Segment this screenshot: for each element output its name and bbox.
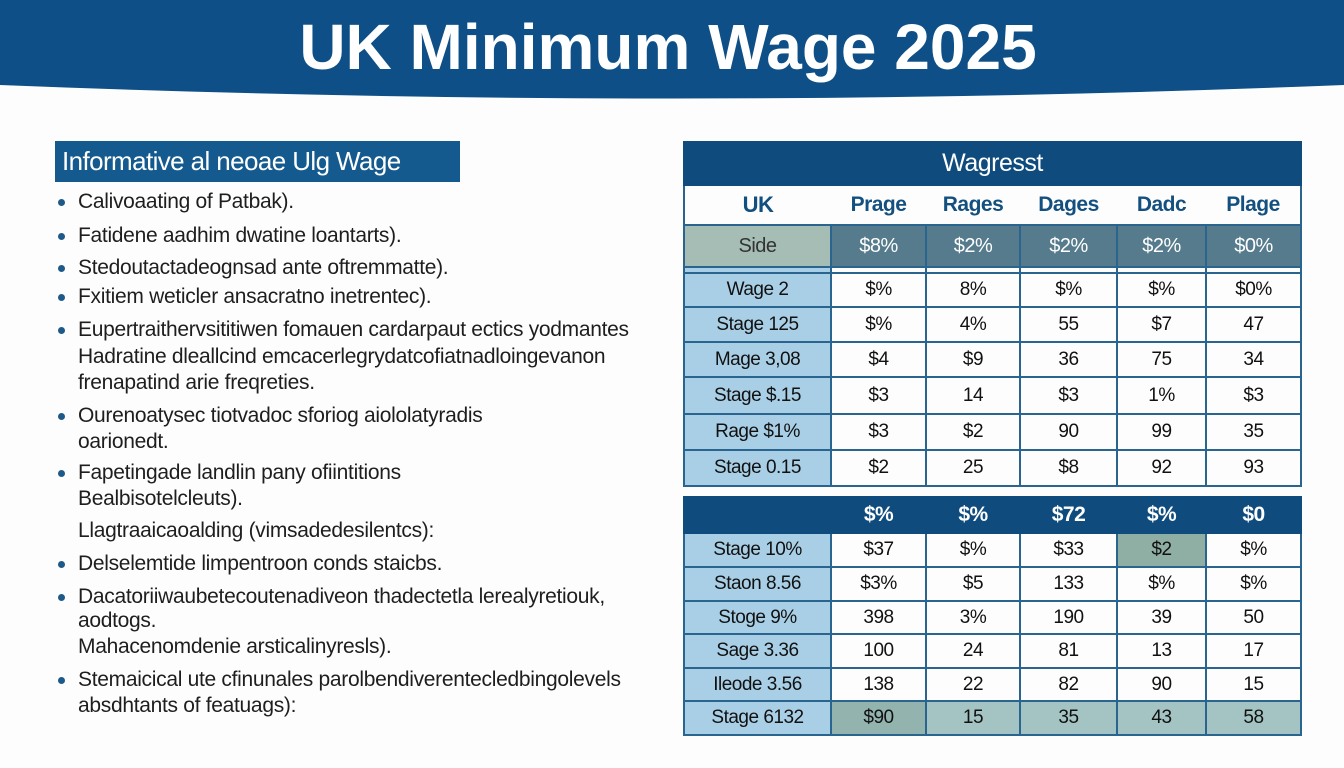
table 2: stage rates: Staon 8.56 (714, 573, 801, 594)
table 2: stage rates (683, 496, 1302, 736)
table 2: stage rates: 24 (963, 640, 983, 661)
table 1: wage rates: 47 (1243, 314, 1264, 334)
table 1: wage rates: 34 (1243, 348, 1264, 370)
bullet list: oarionedt. (78, 430, 168, 453)
table 2: stage rates: 15 (963, 707, 983, 728)
table 2: stage rates: Sage 3.36 (716, 640, 799, 661)
table 2: stage rates: 22 (963, 674, 983, 694)
table 2: stage rates: 398 (863, 606, 894, 628)
table 1: wage rates: $3 (1058, 384, 1079, 406)
table 1: wage rates: 35 (1243, 421, 1264, 442)
table 1: wage rates: Stage 0.15 (714, 457, 801, 478)
heading: informative: Informative al neoae Ulg Wage (62, 146, 401, 176)
table 1: wage rates: 75 (1151, 348, 1172, 370)
table 1: wage rates: 93 (1243, 457, 1264, 478)
table 1: wage rates: $9 (963, 348, 983, 370)
table 1: wage rates: Rage $1% (715, 421, 800, 442)
table 1: wage rates: Dages (1038, 193, 1099, 216)
table 2: stage rates: Stoge 9% (718, 606, 797, 628)
table 2: stage rates: $2 (1151, 539, 1172, 560)
table 1: wage rates (683, 141, 1302, 487)
table 2: stage rates: Stage 6132 (711, 707, 804, 728)
table 1: wage rates: $4 (868, 348, 889, 370)
table 1: wage rates: 90 (1058, 421, 1079, 442)
bullet list: Stemaicical ute cfinunales parolbendiverentecledbingolevels (78, 668, 621, 691)
table 1: wage rates: 55 (1058, 314, 1079, 334)
title banner (0, 0, 1344, 98)
table 2: stage rates: 3% (960, 606, 986, 628)
table 1: wage rates: Stage 125 (716, 314, 799, 334)
table 2: stage rates: $5 (963, 573, 983, 594)
table 1: wage rates: $% (1055, 279, 1082, 300)
table 2: stage rates: $% (1148, 573, 1175, 594)
table 1: wage rates: 4% (960, 314, 986, 334)
table 1: wage rates: Rages (943, 193, 1003, 216)
table 2: stage rates: 50 (1243, 606, 1264, 628)
table 2: stage rates: $3% (860, 573, 897, 594)
table 1: wage rates: Prage (851, 193, 906, 216)
bullet list: Calivoaating of Patbak). (78, 190, 294, 213)
bullet list: Fatidene aadhim dwatine loantarts). (78, 224, 401, 247)
table 2: stage rates: 82 (1058, 674, 1079, 694)
table 2: stage rates: 100 (863, 640, 894, 661)
table 1: wage rates: $0% (1234, 234, 1273, 256)
bullet list: Llagtraaicaoalding (vimsadedesilentcs): (78, 519, 434, 542)
table 1: wage rates: Wage 2 (727, 279, 788, 300)
table 1: wage rates: 99 (1151, 421, 1172, 442)
title banner: UK Minimum Wage 2025 (299, 11, 1037, 83)
table 2: stage rates: 15 (1243, 674, 1264, 694)
table 1: wage rates: $2 (868, 457, 889, 478)
table 1: wage rates: Stage $.15 (714, 384, 801, 406)
bullet list: Bealbisotelcleuts). (78, 487, 243, 510)
table 1: wage rates: $8% (859, 234, 898, 256)
table 1: wage rates: 1% (1148, 384, 1175, 406)
bullet list: Dacatoriiwaubetecoutenadiveon thadectetla lerealyretiouk, (78, 585, 605, 608)
table 2: stage rates: 39 (1151, 606, 1172, 628)
table 1: wage rates: Mage 3,08 (715, 348, 800, 370)
heading: informative (55, 141, 460, 182)
table 2: stage rates: $33 (1053, 539, 1084, 560)
table 1: wage rates: $3 (1243, 384, 1264, 406)
table 2: stage rates: $% (960, 539, 986, 560)
bullet list: Fapetingade landlin pany ofiintitions (78, 461, 401, 484)
bullet list: absdhtants of featuags): (78, 694, 296, 717)
bullet list (58, 190, 629, 717)
table 1: wage rates: $8 (1058, 457, 1079, 478)
table 2: stage rates: 35 (1058, 707, 1079, 728)
table 2: stage rates: 58 (1243, 707, 1264, 728)
table 2: stage rates: 138 (863, 674, 894, 694)
table 2: stage rates: 133 (1053, 573, 1084, 594)
table 2: stage rates: Stage 10% (713, 539, 802, 560)
table 2: stage rates: Ileode 3.56 (713, 674, 802, 694)
bullet list: Fxitiem weticler ansacratno inetrentec). (78, 285, 431, 308)
table 1: wage rates: Dadc (1137, 193, 1186, 216)
table 1: wage rates: $% (1148, 279, 1175, 300)
table 2: stage rates: 90 (1151, 674, 1172, 694)
table 1: wage rates: 92 (1151, 457, 1172, 478)
table 1: wage rates: 25 (963, 457, 983, 478)
table 2: stage rates: $0 (1242, 503, 1265, 526)
bullet list: Ourenoatysec tiotvadoc sforiog aiololatyradis (78, 404, 482, 427)
table 1: wage rates: 14 (963, 384, 983, 406)
bullet list: Stedoutactadeognsad ante oftremmatte). (78, 256, 448, 279)
table 2: stage rates: $72 (1052, 503, 1085, 526)
table 2: stage rates: 13 (1151, 640, 1172, 661)
bullet list: Delselemtide limpentroon conds staicbs. (78, 552, 442, 575)
table 1: wage rates: Side (738, 234, 777, 256)
table 2: stage rates: $% (1240, 573, 1267, 594)
table 1: wage rates: $2% (1049, 234, 1088, 256)
bullet list: Eupertraithervsititiwen fomauen cardarpaut ectics yodmantes (78, 318, 629, 341)
table 2: stage rates: $% (1240, 539, 1267, 560)
table 2: stage rates: $90 (863, 707, 894, 728)
table 1: wage rates: $2 (963, 421, 983, 442)
bullet list: aodtogs. (78, 609, 156, 632)
table 1: wage rates: Plage (1226, 193, 1280, 216)
table 1: wage rates: $7 (1151, 314, 1172, 334)
table 1: wage rates: $% (865, 279, 892, 300)
table 2: stage rates: 43 (1151, 707, 1172, 728)
table 1: wage rates: $2% (1142, 234, 1181, 256)
table 1: wage rates: Wagresst (942, 149, 1043, 177)
table 1: wage rates: UK (743, 192, 773, 217)
table 1: wage rates: 36 (1058, 348, 1079, 370)
bullet list: Mahacenomdenie arsticalinyresls). (78, 635, 391, 658)
table 1: wage rates: $3 (868, 421, 889, 442)
table 1: wage rates: $0% (1235, 279, 1272, 300)
table 2: stage rates: $% (958, 503, 988, 526)
table 1: wage rates: $% (865, 314, 892, 334)
table 2: stage rates: $% (864, 503, 893, 526)
bullet list: frenapatind arie freqreties. (78, 371, 315, 394)
bullet list: Hadratine dleallcind emcacerlegrydatcofiatnadloingevanon (78, 345, 605, 368)
table 1: wage rates: 8% (960, 279, 986, 300)
table 2: stage rates: $% (1147, 503, 1176, 526)
table 2: stage rates: 17 (1243, 640, 1264, 661)
table 2: stage rates: 190 (1053, 606, 1084, 628)
table 1: wage rates: $3 (868, 384, 889, 406)
table 2: stage rates: 81 (1058, 640, 1079, 661)
table 1: wage rates: $2% (954, 234, 992, 256)
table 2: stage rates: $37 (863, 539, 894, 560)
